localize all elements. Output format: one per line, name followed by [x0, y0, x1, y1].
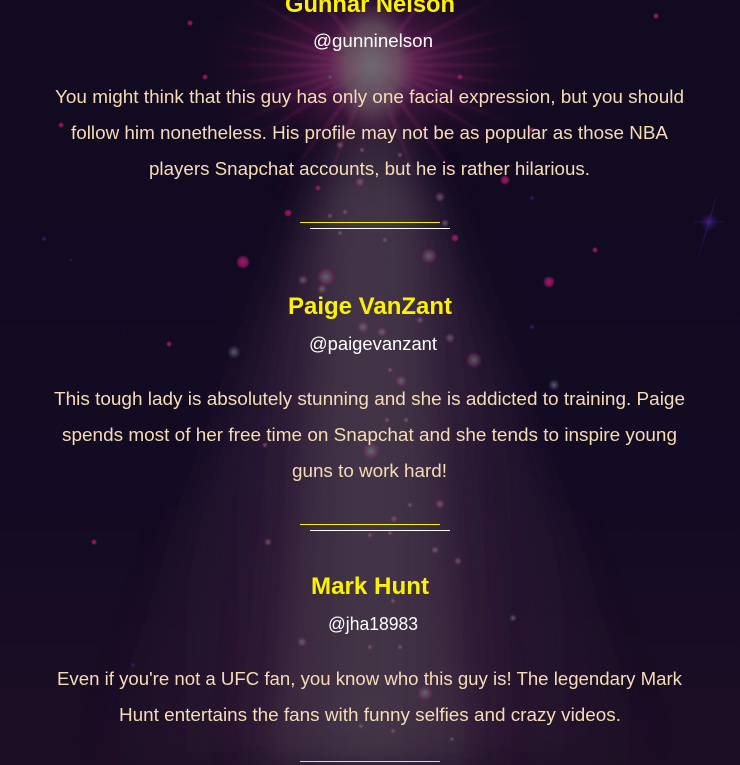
description: Hunt entertains the fans with funny selfies and crazy videos. — [119, 705, 621, 725]
handle: @paigevanzant — [309, 334, 437, 354]
description: guns to work hard! — [292, 461, 447, 481]
description: spends most of her free time on Snapchat and she tends to inspire young — [62, 425, 677, 445]
handle: @jha18983 — [328, 614, 418, 634]
description: This tough lady is absolutely stunning and she is addicted to training. Paige — [54, 389, 685, 409]
name: Paige VanZant — [288, 293, 452, 320]
sparkle star — [694, 190, 724, 262]
description: follow him nonetheless. His profile may not be as popular as those NBA — [71, 123, 668, 143]
description — [54, 389, 685, 481]
particles — [41, 13, 659, 742]
description: Even if you're not a UFC fan, you know who this guy is! The legendary Mark — [57, 669, 683, 689]
description: You might think that this guy has only one facial expression, but you should — [55, 87, 684, 107]
description: players Snapchat accounts, but he is rather hilarious. — [149, 159, 590, 179]
starburst glow — [197, 0, 547, 215]
handle: @gunninelson — [313, 31, 433, 51]
entry: Gunnar Nelson — [55, 0, 684, 179]
name: Mark Hunt — [311, 573, 429, 600]
entry: Mark Hunt — [57, 573, 683, 725]
entry: Paige VanZant — [54, 293, 685, 481]
description — [57, 669, 683, 725]
light beam — [90, 120, 660, 765]
description — [55, 87, 684, 179]
